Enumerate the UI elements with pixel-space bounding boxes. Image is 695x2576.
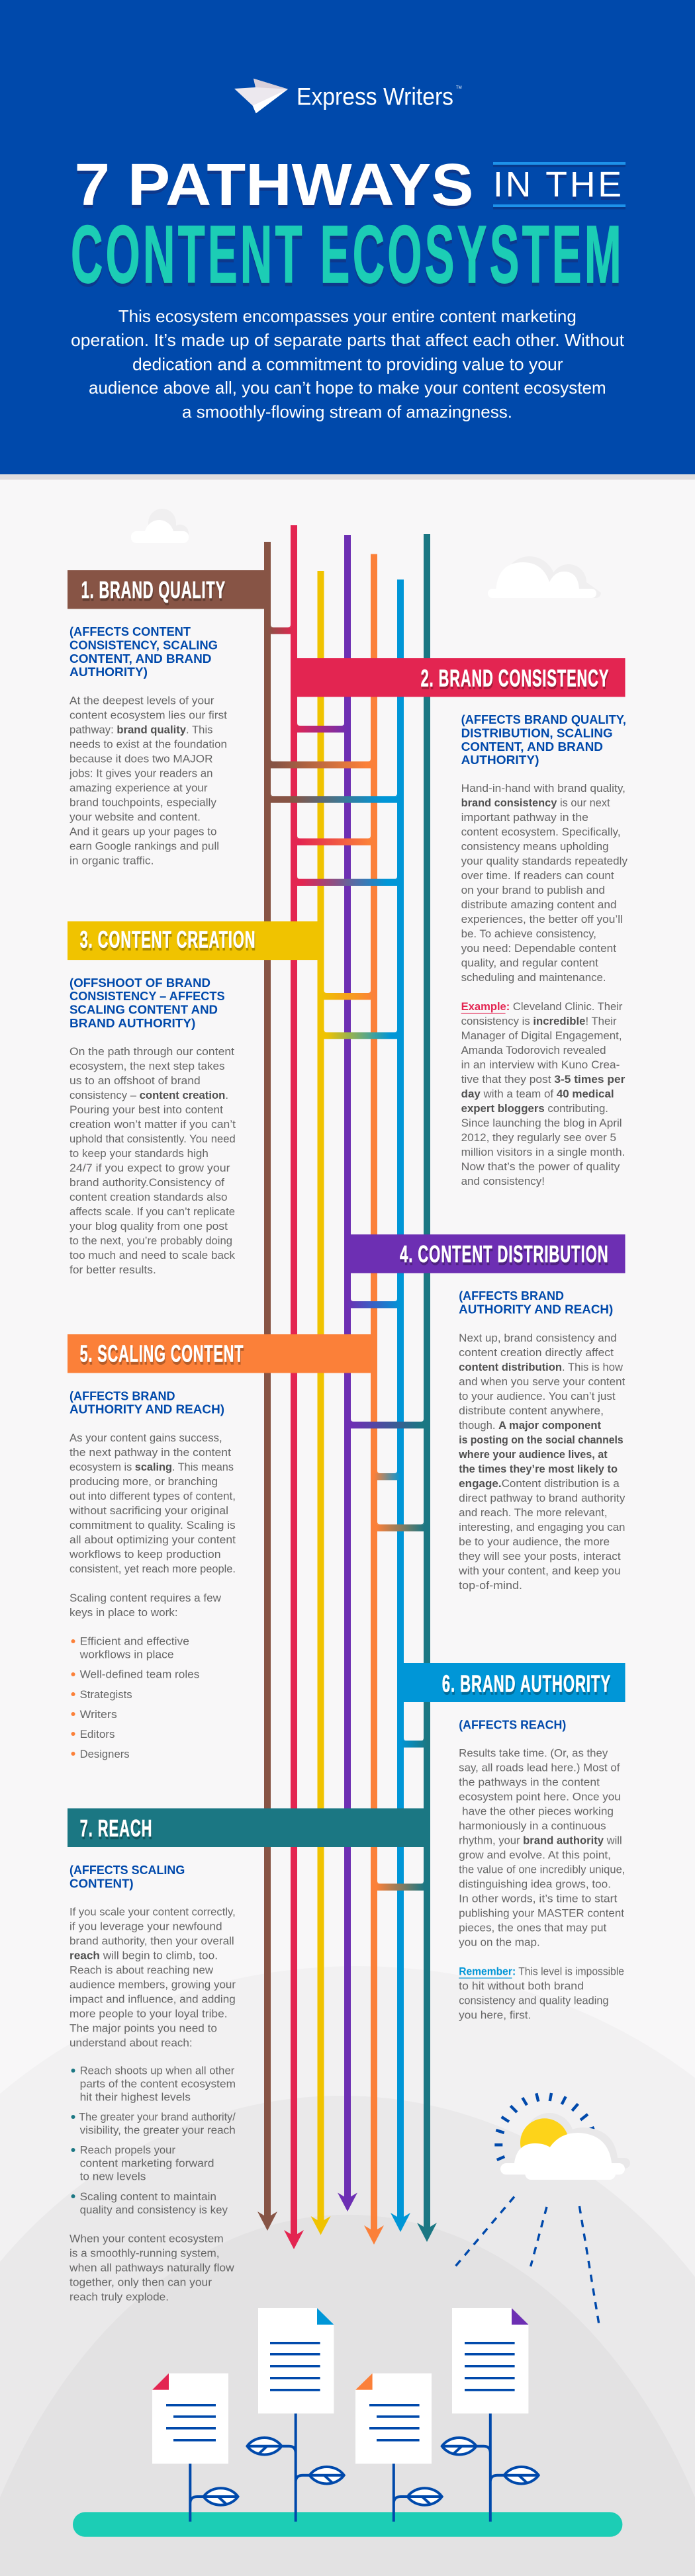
bullet list 5: Well-defined team roles (80, 1669, 199, 1681)
panel text 6: brand authority (459, 1719, 625, 2022)
body 4: though. A major component (459, 1420, 601, 1432)
bullet list 7: visibility, the greater your reach (80, 2125, 236, 2137)
body 1: jobs: It gives your readers an (69, 767, 213, 779)
body 7: Reach is about reaching new (70, 1965, 213, 1977)
body 6: grow and evolve. At this point, (459, 1850, 611, 1862)
body 2: your quality standards repeatedly (461, 855, 628, 867)
body 1: amazing experience at your (70, 782, 208, 794)
example callout: Now that’s the power of quality (461, 1161, 620, 1173)
logo: Express Writers: TM (456, 86, 462, 90)
cloud: small top (131, 509, 189, 543)
ground bar (73, 2512, 622, 2537)
affects 2: AUTHORITY) (461, 753, 539, 767)
body 1: At the deepest levels of your (70, 695, 214, 707)
bullet list 5 (71, 1635, 199, 1760)
affects 5 (70, 1389, 224, 1416)
title: in the: IN THE (493, 165, 624, 204)
body 4: to your audience. You can’t just (459, 1391, 616, 1402)
body 2: on your brand to publish and (461, 884, 605, 896)
body 4: and reach. The more relevant, (459, 1507, 608, 1519)
closing text (69, 2233, 234, 2303)
background hills (0, 1966, 695, 2576)
body 3: affects scale. If you can’t replicate (70, 1206, 235, 1218)
panel text 3: content creation (70, 976, 236, 1276)
bullet list 5: Efficient and effective (80, 1635, 189, 1647)
body 4: Next up, brand consistency and (459, 1332, 617, 1344)
body 5: consistent, yet reach more people. (70, 1563, 236, 1575)
bullet list 5: workflows in place (79, 1649, 174, 1660)
body 3: Pouring your best into content (70, 1104, 223, 1116)
remember callout: Remember: This level is impossible (459, 1966, 624, 1978)
body 4: be to your audience, the more (459, 1536, 610, 1548)
body 1: because it does two MAJOR (70, 753, 213, 765)
body 3: brand authority.Consistency of (70, 1177, 224, 1189)
body 1: And it gears up your pages to (70, 826, 217, 837)
body 2: over time. If readers can count (461, 870, 614, 882)
logo: Express Writers: Express Writers (297, 83, 453, 110)
intro paragraph: a smoothly-flowing stream of amazingness. (182, 402, 512, 422)
body 2: you need: Dependable content (461, 943, 616, 955)
example callout: million visitors in a single month. (461, 1146, 625, 1158)
bullet list 7: Reach shoots up when all other (80, 2065, 235, 2077)
banner 7: reach: 7. REACH (80, 1815, 152, 1842)
bullet list 7 (71, 2065, 236, 2216)
body 6: ecosystem point here. Once you (459, 1791, 621, 1803)
intro paragraph (71, 306, 625, 422)
banner 5: scaling content: 5. SCALING CONTENT (80, 1340, 244, 1367)
affects 7: CONTENT) (70, 1877, 134, 1890)
bullet list 7: content marketing forward (80, 2158, 214, 2170)
body 2: experiences, the better off you’ll (461, 914, 623, 925)
panel text 4: content distribution (458, 1289, 626, 1592)
body 2: content ecosystem. Specifically, (461, 826, 621, 838)
body 3: creation won’t matter if you can’t (70, 1119, 236, 1131)
remember callout: you here, first. (459, 2010, 531, 2022)
affects 4: (AFFECTS BRAND (459, 1289, 564, 1303)
icon: paper plane (234, 79, 288, 113)
bullet list 7: Reach propels your (80, 2145, 176, 2157)
body 3: for better results. (70, 1264, 156, 1276)
body 4: content distribution. This is how (459, 1361, 623, 1373)
affects 1 (70, 625, 218, 679)
closing text: When your content ecosystem (70, 2233, 224, 2245)
closing text: is a smoothly-running system, (70, 2248, 220, 2260)
body 5: out into different types of content, (70, 1490, 236, 1502)
document 3: orange fold (355, 2374, 432, 2464)
body 5: Scaling content requires a few (70, 1592, 221, 1604)
body 1: needs to exist at the foundation (70, 738, 227, 750)
affects 1: (AFFECTS CONTENT (70, 625, 191, 638)
body 4: the times they’re most likely to (459, 1463, 618, 1475)
body 6: the pathways in the content (459, 1777, 600, 1789)
sun (520, 2118, 569, 2167)
body 4: direct pathway to brand authority (459, 1492, 626, 1504)
logo: Express Writers (234, 79, 462, 113)
body 7: If you scale your content correctly, (70, 1907, 236, 1918)
body 7 (70, 1907, 236, 2049)
title (71, 152, 626, 300)
panel text 5: scaling content (69, 1389, 236, 1760)
affects 3 (70, 976, 225, 1030)
body 5: keys in place to work: (70, 1607, 178, 1619)
banner 3: content creation: 3. CONTENT CREATION (80, 926, 255, 953)
body 1 (69, 695, 227, 867)
closing text: together, only then can your (70, 2277, 212, 2289)
affects 7: (AFFECTS SCALING (70, 1864, 185, 1877)
header band (0, 0, 695, 480)
body 3: ecosystem, the next step takes (70, 1060, 225, 1072)
body 4: and when you serve your content (459, 1376, 626, 1388)
bullet list 7: Scaling content to maintain (80, 2191, 216, 2203)
title: 7 PATHWAYS (74, 152, 474, 218)
body 4: top-of-mind. (459, 1580, 522, 1592)
affects 4 (459, 1289, 613, 1316)
bullet list 5: Strategists (80, 1689, 132, 1701)
body 7: brand authority, then your overall (70, 1936, 234, 1948)
banner 7: reach (68, 1809, 430, 1847)
body 6: distinguishing idea grows, too. (459, 1879, 611, 1891)
icon: sun and cloud (494, 2093, 630, 2180)
intro paragraph: audience above all, you can’t hope to make your content ecosystem (89, 378, 606, 398)
rain dashes (453, 2197, 600, 2329)
body 2: important pathway in the (461, 812, 588, 824)
connector fillets (271, 624, 424, 1883)
body 3 (70, 1046, 236, 1276)
body 6: harmoniously in a continuous (459, 1821, 606, 1832)
body 5: without sacrificing your original (69, 1505, 228, 1517)
body 2 (461, 783, 628, 984)
affects 3: BRAND AUTHORITY) (70, 1017, 195, 1030)
remember callout: consistency and quality leading (459, 1995, 609, 2007)
body 7: more people to your loyal tribe. (70, 2008, 228, 2020)
affects 1: CONTENT, AND BRAND (70, 652, 212, 665)
body 6: publishing your MASTER content (459, 1908, 624, 1920)
intro paragraph: This ecosystem encompasses your entire content marketing (118, 306, 577, 326)
affects 2 (461, 713, 626, 767)
bullet list 7: to new levels (80, 2171, 146, 2183)
plants: stems and leaves (190, 2413, 539, 2522)
document 4: purple fold (452, 2308, 528, 2413)
banner 4: content distribution (344, 1234, 625, 1273)
affects 1: AUTHORITY) (70, 665, 148, 679)
bullet list 7: quality and consistency is key (80, 2204, 228, 2216)
affects 3: (OFFSHOOT OF BRAND (70, 976, 210, 990)
body 6 (459, 1748, 625, 1949)
banner 1: brand quality: 1. BRAND QUALITY (81, 576, 226, 603)
body 4: engage.Content distribution is a (459, 1478, 620, 1490)
example callout: in an interview with Kuno Crea- (461, 1059, 620, 1071)
intro paragraph: dedication and a commitment to providing value to your (132, 354, 563, 374)
body 3: your blog quality from one post (70, 1221, 228, 1232)
body 2: consistency means upholding (461, 841, 609, 853)
body 3: to keep your standards high (70, 1148, 208, 1160)
body 3: 24/7 if you expect to grow your (70, 1162, 230, 1174)
body 6: rhythm, your brand authority will (459, 1835, 622, 1847)
example callout: and consistency! (461, 1176, 545, 1187)
banner 3: content creation (68, 922, 324, 960)
bullet list 5: Editors (80, 1729, 115, 1740)
body 6: have the other pieces working (462, 1806, 614, 1818)
affects 7 (70, 1864, 185, 1890)
pathway network (257, 525, 437, 2249)
body 2: distribute amazing content and (461, 899, 617, 911)
body 3: consistency – content creation. (70, 1090, 228, 1101)
example callout: Manager of Digital Engagement, (461, 1030, 622, 1042)
banner 2: brand consistency (291, 658, 625, 697)
banner 5: scaling content (68, 1334, 377, 1373)
body 7: impact and influence, and adding (70, 1994, 236, 2006)
closing text: when all pathways naturally flow (69, 2262, 234, 2274)
affects 3: SCALING CONTENT AND (70, 1004, 218, 1017)
body 4: they will see your posts, interact (459, 1551, 621, 1563)
sun and cloud shadow (501, 2113, 630, 2168)
panel text 1: brand quality (69, 625, 227, 867)
document 1: red fold (152, 2374, 228, 2464)
example callout: 2012, they regularly see over 5 (461, 1132, 616, 1144)
body 1: in organic traffic. (70, 855, 154, 867)
cloud: large top (488, 556, 601, 598)
body 2: quality, and regular content (461, 957, 598, 969)
example callout: Example: Cleveland Clinic. Their (461, 1001, 623, 1013)
body 4 (458, 1332, 626, 1592)
body 7: reach will begin to climb, too. (70, 1950, 218, 1962)
body 2: brand consistency is our next (461, 797, 610, 809)
intro paragraph: operation. It’s made up of separate parts that affect each other. Without (71, 330, 625, 350)
body 6: the value of one incredibly unique, (459, 1864, 625, 1876)
affects 5: (AFFECTS BRAND (70, 1389, 175, 1402)
bullet list 5: Writers (80, 1709, 117, 1721)
example callout: expert bloggers contributing. (461, 1103, 608, 1115)
body 3: us to an offshoot of brand (70, 1075, 201, 1087)
closing text: reach truly explode. (70, 2292, 169, 2303)
cloud (500, 2133, 625, 2180)
body 5: the next pathway in the content (70, 1447, 231, 1459)
body 6: In other words, it’s time to start (459, 1893, 618, 1905)
example callout: consistency is incredible! Their (461, 1015, 617, 1027)
panel text 7: reach (69, 1864, 236, 2303)
body 7: understand about reach: (70, 2038, 193, 2049)
remember callout (459, 1966, 624, 2022)
affects 2: DISTRIBUTION, SCALING (461, 726, 613, 740)
body 1: brand touchpoints, especially (70, 796, 217, 808)
body 4: with your content, and keep you (458, 1565, 621, 1577)
body 4: where your audience lives, at (458, 1449, 608, 1461)
example callout: day with a team of 40 medical (461, 1088, 614, 1100)
connectors (264, 627, 430, 1891)
body 7: if you leverage your newfound (70, 1921, 222, 1933)
affects 5: AUTHORITY AND REACH) (70, 1403, 224, 1416)
affects 2: (AFFECTS BRAND QUALITY, (461, 713, 626, 726)
example callout: Amanda Todorovich revealed (461, 1045, 606, 1056)
body 5: producing more, or branching (70, 1476, 218, 1488)
bullet list 5: Designers (80, 1748, 130, 1760)
body 4: content creation directly affect (459, 1347, 614, 1359)
panel text 2: brand consistency (461, 713, 628, 1187)
body 1: pathway: brand quality. This (70, 724, 213, 736)
body 2: Hand-in-hand with brand quality, (461, 783, 626, 794)
remember callout: to hit without both brand (459, 1981, 584, 1993)
body 5: ecosystem is scaling. This means (70, 1461, 234, 1473)
body 2: be. To achieve consistency, (461, 928, 596, 940)
example callout: Since launching the blog in April (461, 1117, 622, 1129)
body 6: pieces, the ones that may put (459, 1922, 607, 1934)
body 3: too much and need to scale back (70, 1250, 236, 1262)
body 7: audience members, growing your (70, 1979, 236, 1991)
body 1: your website and content. (70, 811, 201, 823)
body 3: On the path through our content (70, 1046, 234, 1058)
body 5: all about optimizing your content (70, 1534, 236, 1546)
body 5: workflows to keep production (69, 1549, 221, 1561)
bullet list 7: The greater your brand authority/ (79, 2112, 236, 2124)
affects 6: (AFFECTS REACH) (459, 1719, 566, 1732)
body 7: The major points you need to (70, 2023, 217, 2035)
body 6: you on the map. (459, 1937, 540, 1949)
banner 1: brand quality (68, 570, 271, 609)
body 5: commitment to quality. Scaling is (70, 1520, 236, 1531)
body 1: content ecosystem lies our first (70, 709, 227, 721)
body 3: uphold that consistently. You need (70, 1133, 236, 1145)
body 4: is posting on the social channels (459, 1434, 624, 1446)
affects 1: CONSISTENCY, SCALING (70, 638, 218, 652)
body 3: content creation standards also (70, 1191, 228, 1203)
body 3: to the next, you’re probably doing (70, 1235, 232, 1247)
affects 2: CONTENT, AND BRAND (461, 740, 603, 753)
example callout (461, 1001, 626, 1187)
body 6: Results take time. (Or, as they (459, 1748, 608, 1760)
arrowheads (257, 2192, 437, 2249)
document 2: blue fold (258, 2308, 334, 2413)
sun rays (494, 2093, 594, 2160)
bullet list 7: hit their highest levels (80, 2092, 191, 2104)
affects 3: CONSISTENCY – AFFECTS (70, 990, 225, 1003)
pipes (264, 525, 430, 2235)
affects 4: AUTHORITY AND REACH) (459, 1303, 613, 1316)
banner 6: brand authority (397, 1663, 625, 1702)
body 4: distribute content anywhere, (459, 1405, 604, 1417)
body 2: scheduling and maintenance. (461, 972, 606, 984)
example callout: tive that they post 3-5 times per (461, 1074, 626, 1086)
body 5: As your content gains success, (70, 1432, 222, 1444)
bullet list 7: parts of the content ecosystem (80, 2079, 236, 2090)
body 1: earn Google rankings and pull (70, 840, 219, 852)
body 5 (69, 1432, 236, 1619)
body 4: interesting, and engaging you can (459, 1522, 625, 1533)
body 6: say, all roads lead here.) Most of (459, 1762, 620, 1774)
